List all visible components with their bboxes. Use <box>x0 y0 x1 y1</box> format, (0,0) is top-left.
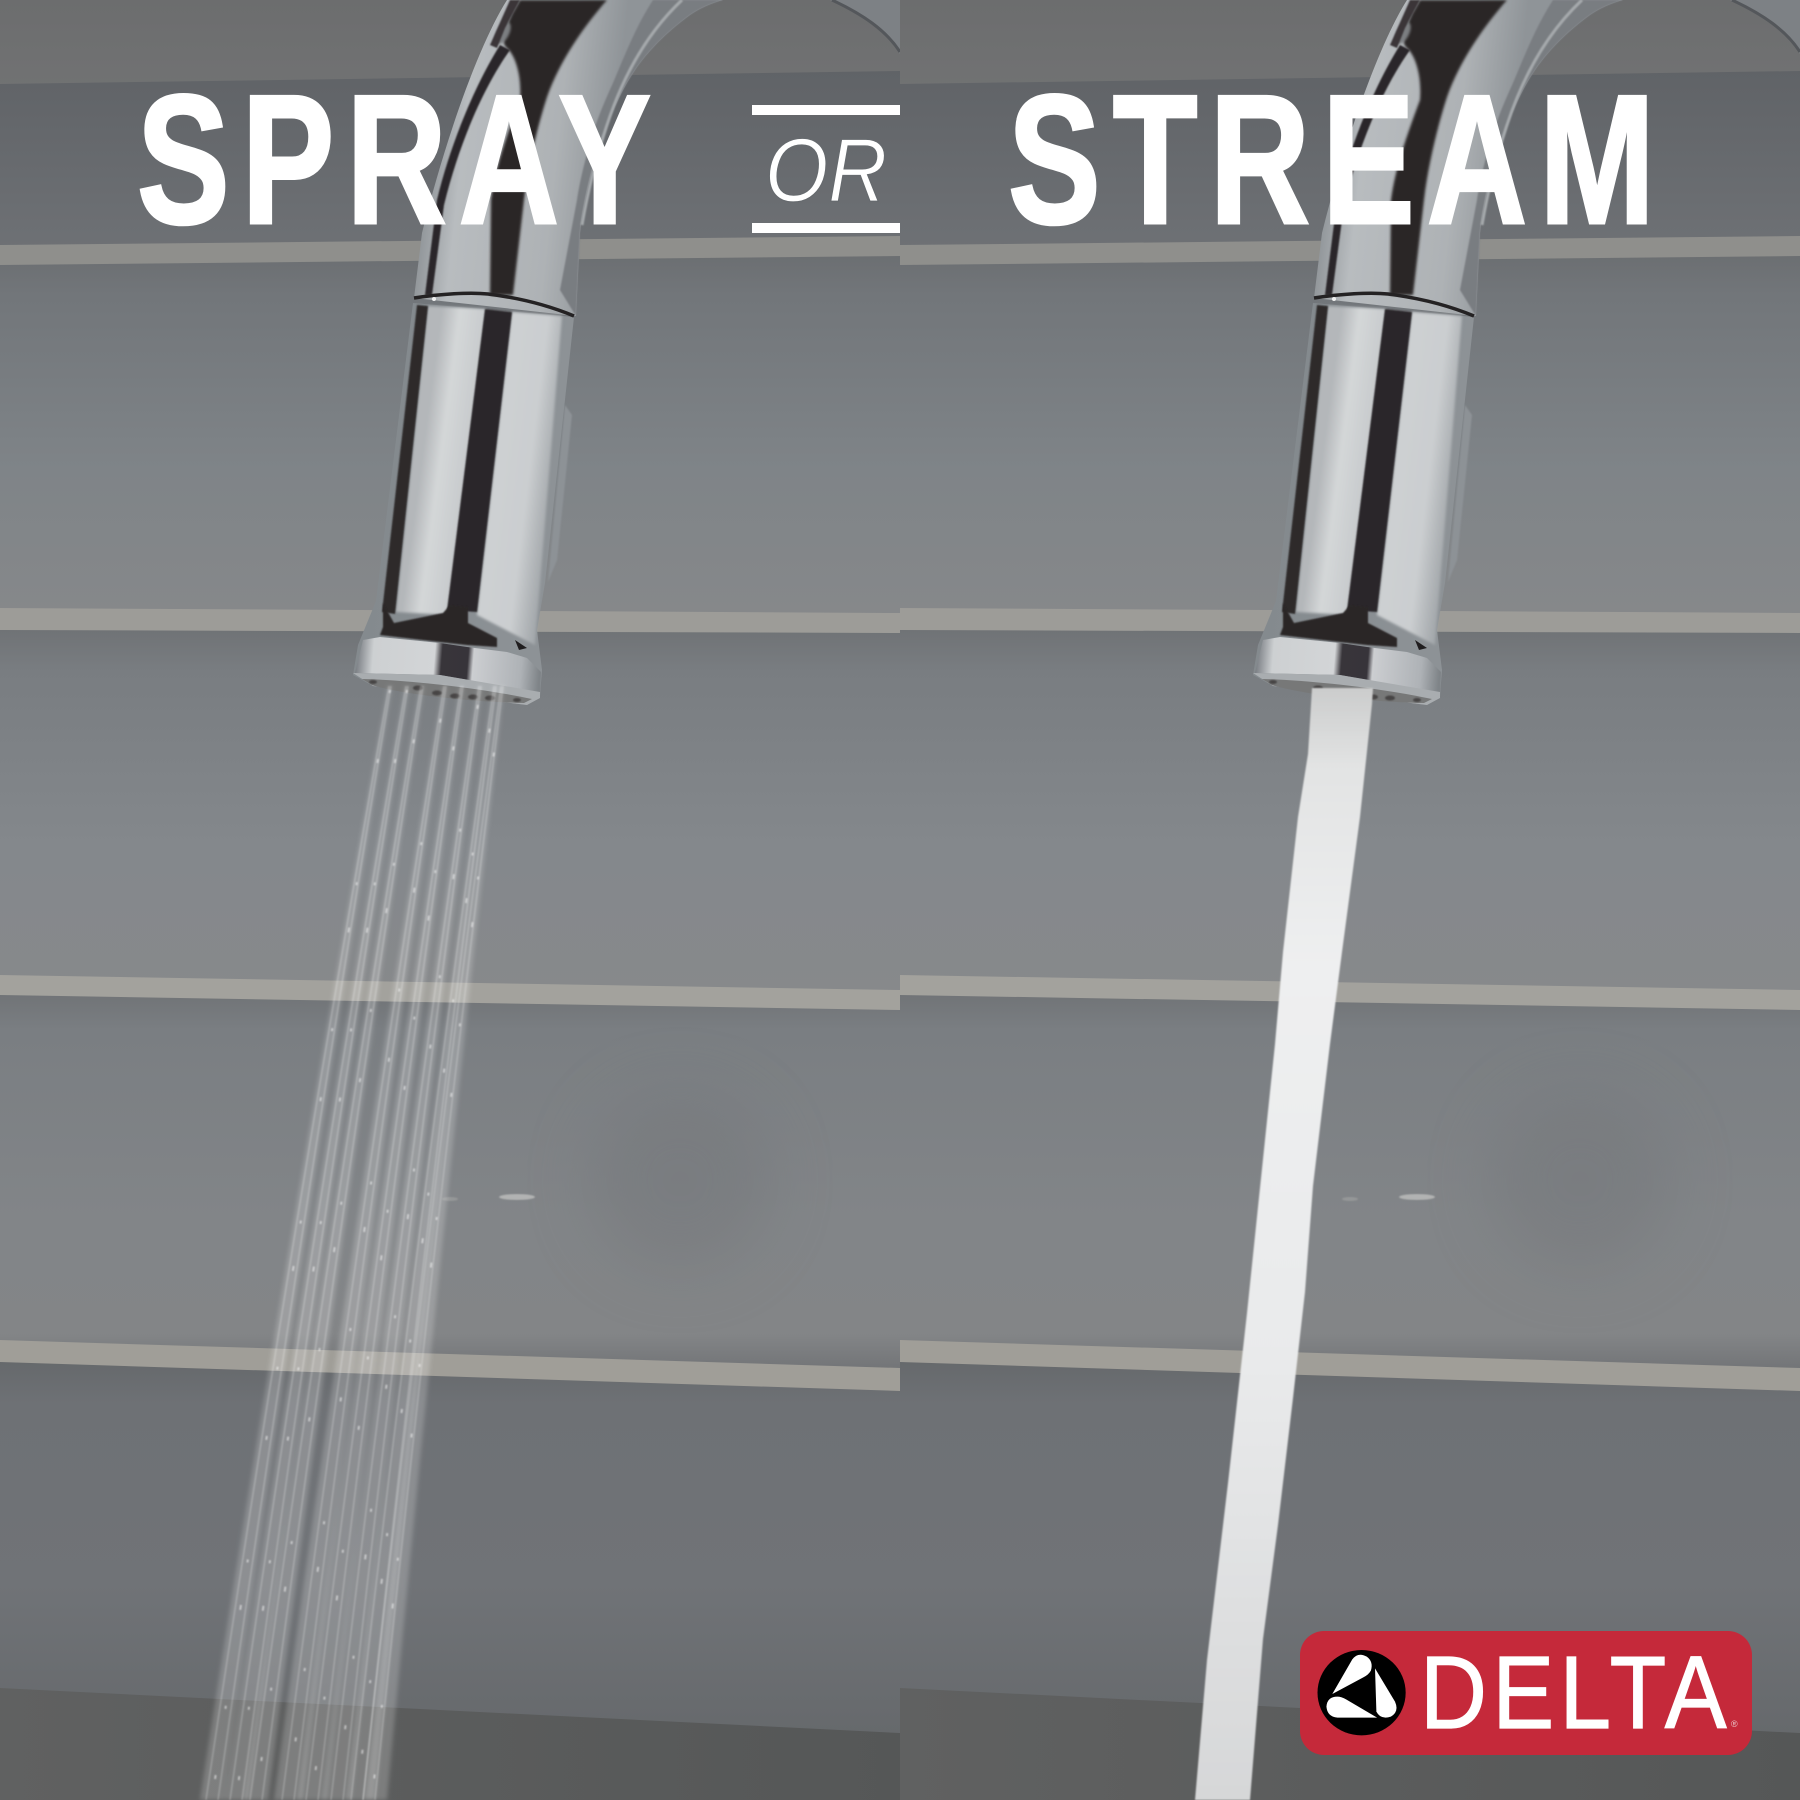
registered mark: ® <box>1731 1719 1738 1729</box>
icon: Delta triangle mark <box>1318 1650 1406 1735</box>
heading: SPRAY: SPRAY <box>137 56 663 262</box>
logo wordmark: DELTA <box>1420 1635 1732 1750</box>
spray droplets <box>212 690 502 1800</box>
background: tiled wall and counter <box>0 0 900 1800</box>
OR bottom rule <box>752 223 900 233</box>
spray strands <box>206 686 503 1800</box>
divider: OR <box>752 105 900 233</box>
faucet: chrome spout <box>1253 0 1623 705</box>
logo background <box>1300 1631 1752 1755</box>
spray soft bands <box>200 686 504 1800</box>
OR word: OR <box>765 121 887 221</box>
water: spray streams <box>200 686 504 1800</box>
panel: spray <box>0 0 900 1800</box>
logo: Delta <box>1300 1631 1752 1755</box>
panel: stream <box>900 0 1800 1800</box>
background: tiled wall and counter <box>900 0 1800 1800</box>
water: solid stream <box>1195 688 1373 1800</box>
faucet: chrome spout <box>353 0 723 705</box>
OR top rule <box>752 105 900 115</box>
